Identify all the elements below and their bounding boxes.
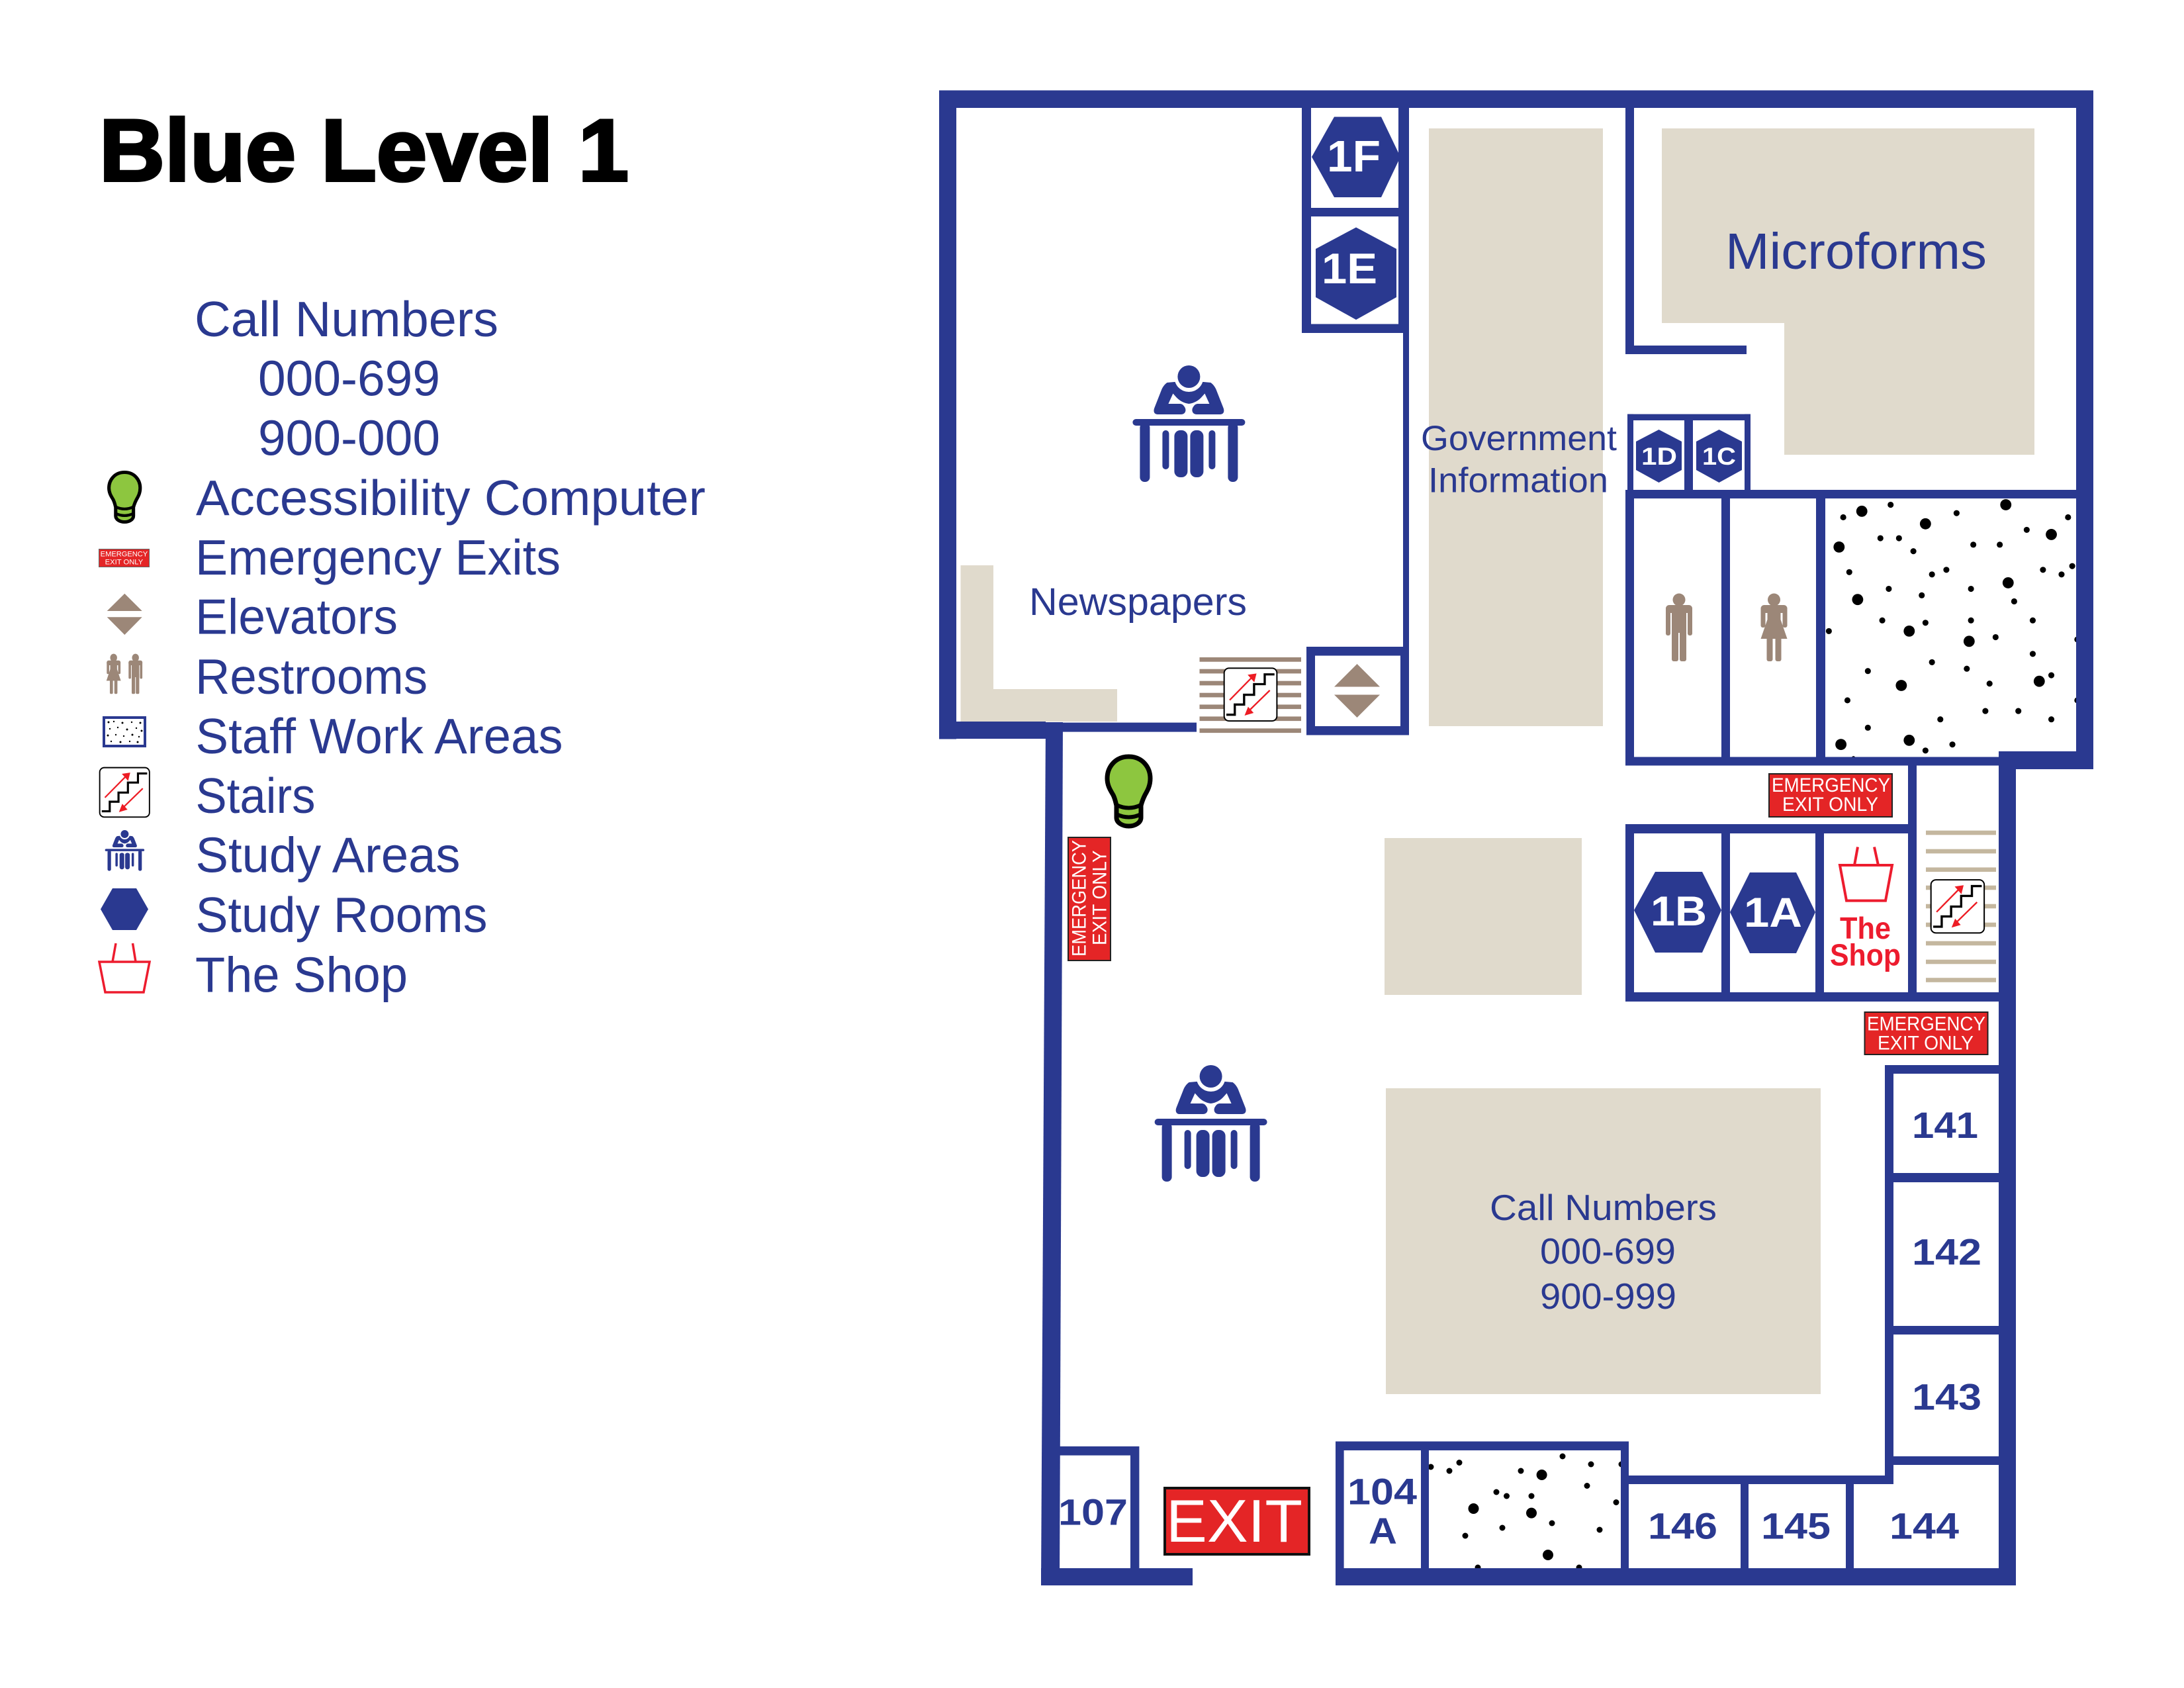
label: the shop: The	[1840, 911, 1891, 945]
study room 1B	[1634, 872, 1721, 953]
label: call numbers	[1490, 1187, 1717, 1317]
exit sign: EXIT	[1166, 1488, 1302, 1555]
icon: the shop basket	[1840, 847, 1892, 901]
study room 1B: 1B	[1651, 888, 1707, 935]
shelving: call numbers	[1386, 1088, 1821, 1394]
room number 141: 141	[1912, 1104, 1978, 1146]
room number 146: 146	[1648, 1505, 1717, 1547]
emergency sign: east: EXIT ONLY	[1878, 1033, 1974, 1055]
study room 1C	[1696, 430, 1742, 483]
legend icon: restrooms	[107, 654, 142, 694]
legend icon: shop basket	[99, 943, 150, 992]
legend icon: elevators	[107, 594, 142, 635]
icon: study area main	[1155, 1062, 1267, 1182]
room number 104 A: 104	[1347, 1471, 1417, 1513]
icon: accessibility computer bulb	[1107, 757, 1150, 826]
shelving: center block	[1385, 838, 1582, 995]
legend icon: accessibility computer bulb	[109, 473, 140, 522]
study room 1E: 1E	[1322, 244, 1377, 293]
emergency sign: vertical: EMERGENCY	[1069, 840, 1091, 957]
room number 107: 107	[1058, 1491, 1128, 1533]
legend label: call numbers: Call Numbers	[195, 291, 498, 347]
icon: stairs upper	[1224, 668, 1277, 721]
legend icon: emergency exit: EXIT ONLY	[105, 559, 144, 567]
label: government information: Government	[1421, 419, 1617, 458]
legend label: 000-699: 000-699	[258, 351, 440, 406]
study room 1C: 1C	[1702, 443, 1736, 470]
legend label: elevators: Elevators	[195, 589, 398, 645]
title: Blue Level 1	[99, 102, 629, 200]
legend icon: emergency exit: EMERGENCY	[101, 551, 148, 559]
icon: stairs lower	[1931, 880, 1984, 933]
legend icon: stairs	[100, 768, 150, 817]
legend label: 900-000: 900-000	[258, 410, 440, 465]
shelving: microforms	[1662, 128, 2034, 455]
label: government information: Information	[1428, 461, 1608, 500]
walls	[939, 90, 2093, 1585]
icon: women's restroom	[1760, 593, 1787, 661]
emergency sign: vertical	[1068, 837, 1111, 961]
study room 1D: 1D	[1641, 443, 1677, 470]
label: the shop: Shop	[1830, 937, 1901, 972]
icon: men's restroom	[1666, 593, 1692, 661]
emergency sign: restrooms: EMERGENCY	[1772, 774, 1890, 796]
room number 104 A: A	[1369, 1510, 1397, 1552]
legend label: study areas: Study Areas	[196, 827, 461, 883]
label: newspapers: Newspapers	[1029, 581, 1247, 624]
legend label: emergency exits: Emergency Exits	[195, 530, 561, 585]
staff work area dots: upper	[1826, 499, 2080, 760]
legend label: accessibility computer: Accessibility Computer	[196, 470, 705, 526]
stairs stripes: lower	[1926, 831, 1996, 982]
label: call numbers: 900-999	[1540, 1276, 1676, 1317]
study room 1E	[1316, 228, 1396, 320]
legend label: staff work areas: Staff Work Areas	[196, 708, 563, 764]
icon: elevator	[1334, 664, 1380, 718]
emergency sign: restrooms: EXIT ONLY	[1782, 794, 1878, 816]
study room 1F	[1312, 117, 1400, 197]
study room 1D	[1636, 430, 1682, 483]
icon: study area newspapers	[1132, 363, 1245, 482]
shelving: government information	[1429, 128, 1603, 726]
label: the shop	[1830, 911, 1901, 972]
emergency sign: east: EMERGENCY	[1867, 1013, 1985, 1035]
emergency sign: east	[1865, 1012, 1988, 1055]
legend label: restrooms: Restrooms	[195, 649, 428, 704]
legend icon: study room hexagon	[101, 888, 148, 930]
panel: floor plan	[939, 90, 2093, 1585]
legend icon: staff work areas	[104, 718, 145, 746]
room number 143: 143	[1912, 1376, 1981, 1418]
staff work area dots: lower	[1428, 1454, 1624, 1570]
room number 145: 145	[1761, 1505, 1831, 1547]
room number 144: 144	[1889, 1505, 1959, 1547]
study room 1A	[1730, 872, 1815, 953]
study room 1A: 1A	[1744, 890, 1802, 936]
label: government information	[1421, 419, 1617, 500]
stairs stripes: upper	[1199, 657, 1301, 733]
room number 104 A	[1347, 1471, 1417, 1552]
legend label: stairs: Stairs	[196, 768, 315, 823]
legend icon: study areas	[105, 829, 144, 871]
legend icon: emergency exit	[99, 549, 150, 567]
panel: legend	[99, 291, 705, 1002]
emergency sign: vertical: EXIT ONLY	[1089, 850, 1111, 945]
study room 1F: 1F	[1327, 132, 1381, 181]
shelving: newspapers	[961, 565, 1117, 722]
emergency sign: restrooms	[1769, 774, 1892, 817]
label: call numbers: 000-699	[1540, 1231, 1676, 1272]
label: call numbers: Call Numbers	[1490, 1187, 1717, 1228]
room number 142: 142	[1912, 1231, 1981, 1273]
legend label: the shop: The Shop	[195, 947, 408, 1002]
label: microforms: Microforms	[1725, 223, 1987, 280]
legend label: study rooms: Study Rooms	[196, 887, 487, 943]
